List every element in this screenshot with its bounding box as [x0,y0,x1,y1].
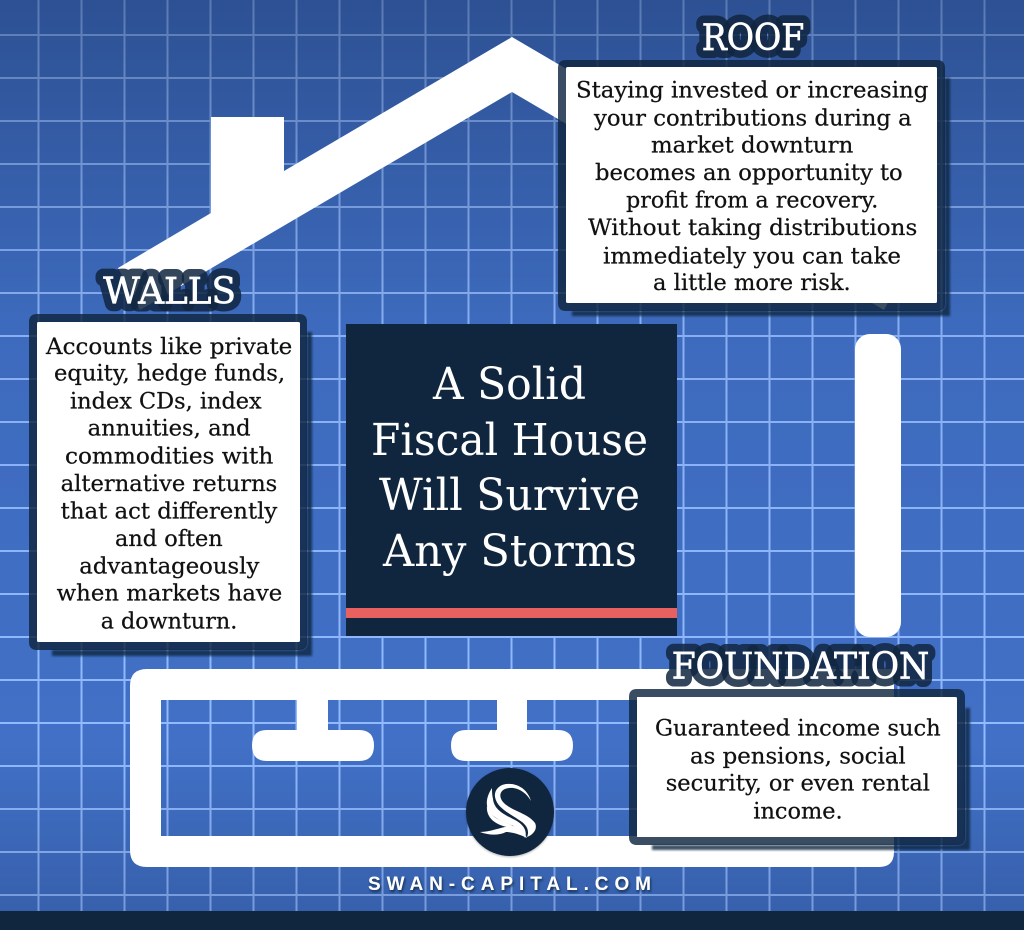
foundation fixture left [252,699,374,761]
walls text: Accounts like private [45,334,292,360]
walls text: annuities, and [88,416,251,442]
walls heading: WALLS [103,271,236,312]
title text: Will Survive [379,470,640,521]
roof text: market downturn [651,133,853,159]
roof text: your contributions during a [593,105,912,131]
walls text: and often [115,526,223,552]
foundation text [655,716,941,824]
roof text: a little more risk. [653,270,851,296]
accent bar [346,608,677,618]
foundation text: income. [753,798,843,824]
walls text [45,334,292,634]
walls text: equity, hedge funds, [54,361,285,387]
title text [371,359,648,577]
walls text: commodities with [65,443,273,469]
panel: walls [29,271,312,656]
walls text: a downturn. [101,608,237,634]
foundation heading: FOUNDATION [672,646,929,687]
panel: roof [558,18,950,316]
title text: Any Storms [382,526,637,577]
foundation text: as pensions, social [690,743,906,769]
title text: Fiscal House [371,415,648,466]
walls text: advantageously [79,553,260,579]
foundation fixture centre [451,699,573,761]
foundation text: Guaranteed income such [655,716,941,742]
foundation heading: FOUNDATION [672,646,929,687]
walls text: when markets have [57,581,282,607]
title text: A Solid [432,359,586,410]
house outline: foundation frame [130,669,894,867]
website address: SWAN-CAPITAL.COM [368,874,651,895]
walls text: index CDs, index [70,388,262,414]
walls text: that act differently [61,498,278,524]
bottom bar [0,911,1024,930]
roof text: Without taking distributions [588,215,917,241]
roof text: becomes an opportunity to [595,160,903,186]
house outline: right wall [855,334,901,637]
house outline: roof and chimney [118,37,906,310]
foundation text: security, or even rental [666,771,930,797]
icon: swan logo [466,768,554,857]
panel: foundation [629,646,970,850]
walls heading: WALLS [103,271,236,312]
roof text: Staying invested or increasing [576,78,928,104]
title panel [346,324,677,636]
roof text: immediately you can take [603,243,901,269]
roof text: profit from a recovery. [626,187,878,213]
roof text [576,78,928,296]
roof heading: ROOF [702,18,804,59]
walls text: alternative returns [61,471,277,497]
roof heading: ROOF [702,18,804,59]
